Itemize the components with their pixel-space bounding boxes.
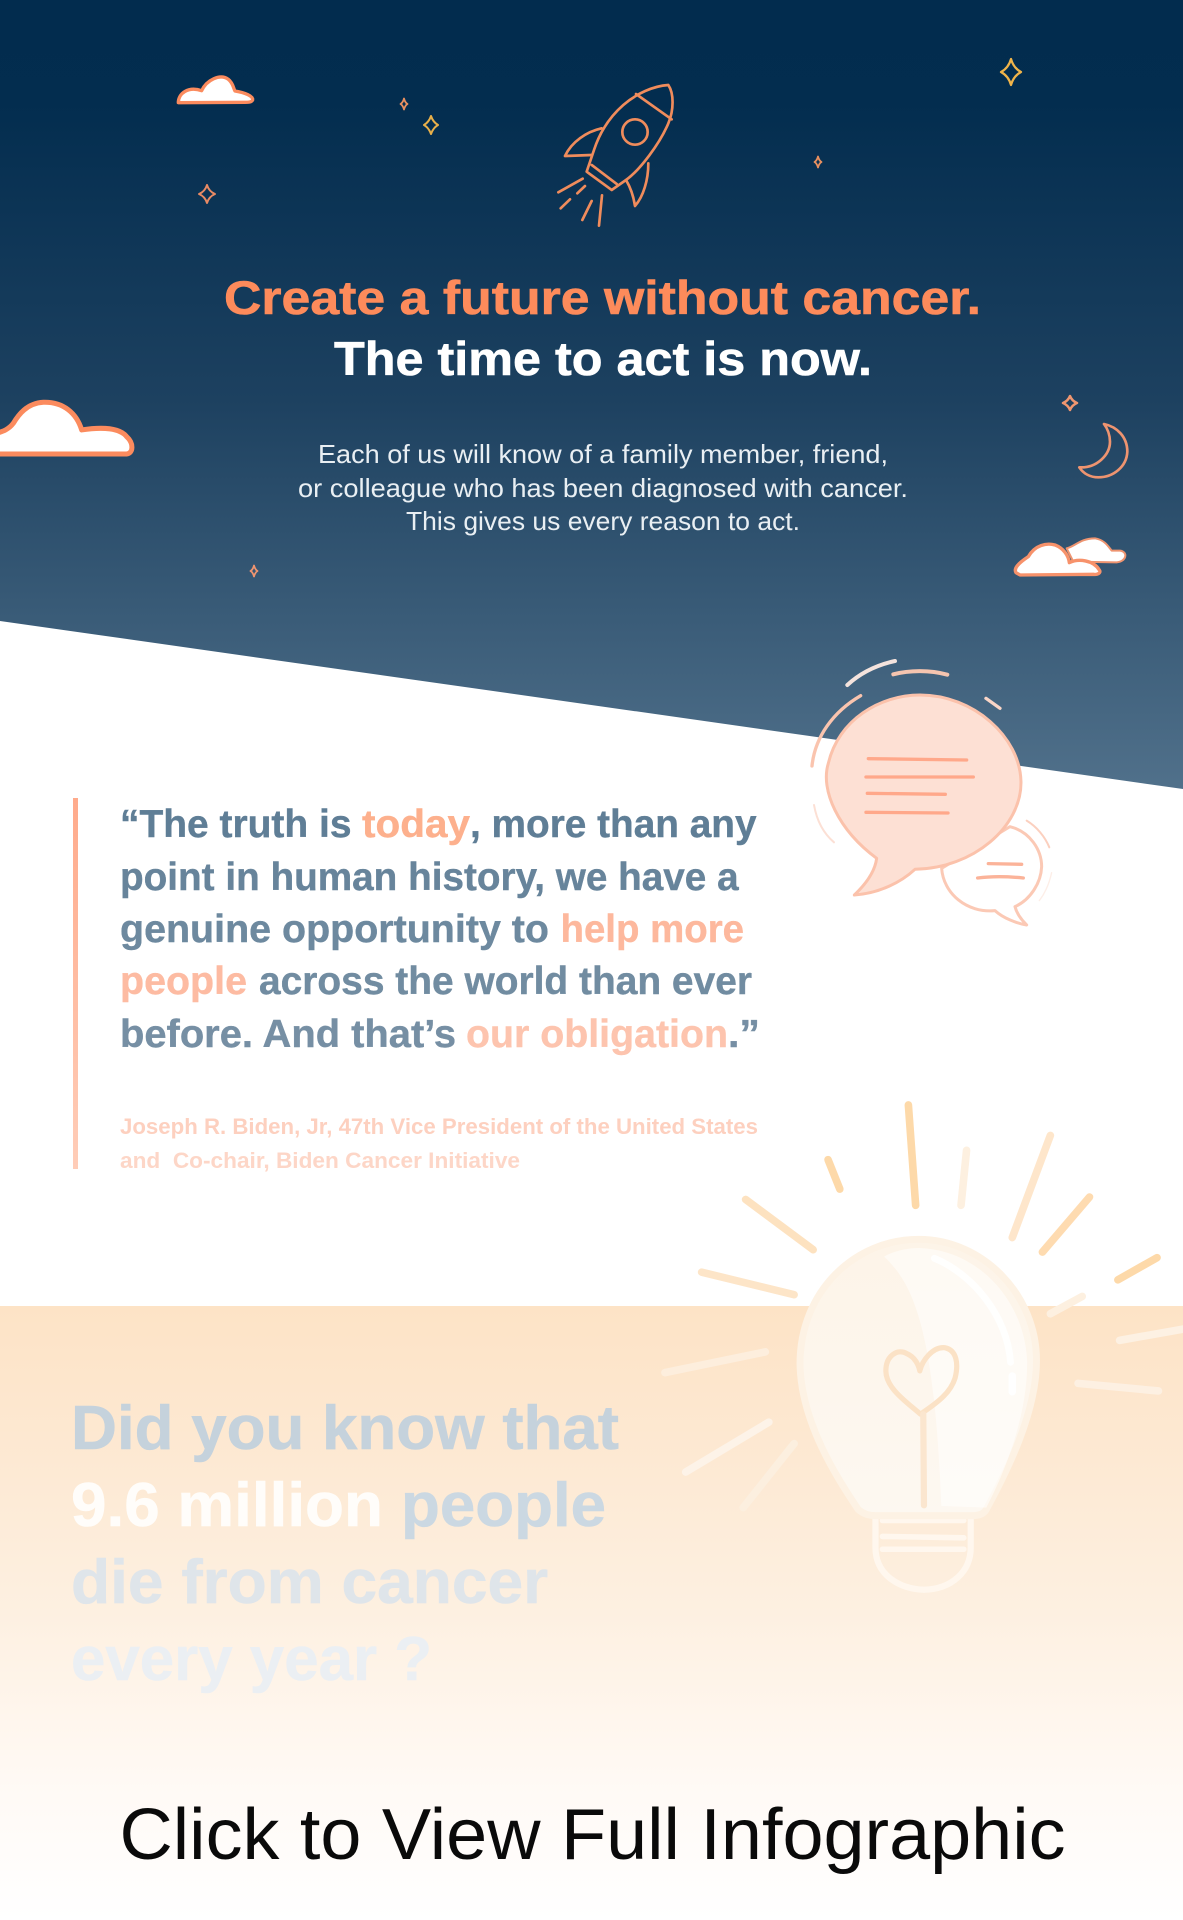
panel: night sky header (0, 0, 1183, 800)
fact text: Did you know that (71, 1394, 619, 1463)
quote: before. And that’s (120, 1013, 456, 1056)
quote: , more than any (470, 803, 757, 846)
fact text: people (401, 1471, 606, 1540)
icon: large cloud left edge (0, 402, 132, 454)
quote: help more (560, 908, 744, 951)
fact text: die from cancer (71, 1548, 548, 1617)
icon: speech bubbles (812, 661, 1052, 925)
quote attribution: Joseph R. Biden, Jr, 47th Vice President of the United States (120, 1114, 758, 1139)
quote: people (120, 960, 247, 1003)
text block: intro: or colleague who has been diagnosed with cancer. (298, 473, 908, 503)
quote: point in human history, we have a (120, 856, 739, 899)
text block: intro: Each of us will know of a family member, friend, (318, 439, 888, 469)
panel: peach fact section (0, 1306, 1183, 1920)
heading: Create a future without cancer. (224, 271, 981, 324)
fact text (71, 1394, 619, 1694)
icon: stars (199, 59, 1077, 576)
icon: rocket (558, 85, 673, 226)
quote attribution (120, 1114, 758, 1173)
heading: The time to act is now. (334, 332, 872, 385)
icon: double cloud right (1015, 538, 1125, 575)
quote: genuine opportunity to (120, 908, 549, 951)
fact text: 9.6 million (71, 1471, 383, 1540)
quote: across the world than ever (259, 960, 752, 1003)
accent bar (73, 798, 78, 1169)
quote: .” (728, 1013, 760, 1056)
icon: crescent moon (1079, 424, 1127, 477)
quote attribution: and Co-chair, Biden Cancer Initiative (120, 1148, 520, 1173)
call to action: Click to View Full Infographic (120, 1795, 1066, 1875)
panel: white quote section (0, 621, 1183, 1307)
heading (224, 271, 981, 385)
quote (120, 803, 760, 1056)
icon: small cloud top left (178, 77, 253, 103)
quote: today (362, 803, 470, 846)
text block: intro (298, 439, 908, 536)
text block: intro: This gives us every reason to act. (406, 506, 800, 536)
fact text: every year ? (71, 1625, 432, 1694)
quote: “The truth is (120, 803, 352, 846)
quote: our obligation (466, 1013, 728, 1056)
icon: light bulb with rays (665, 1105, 1183, 1590)
